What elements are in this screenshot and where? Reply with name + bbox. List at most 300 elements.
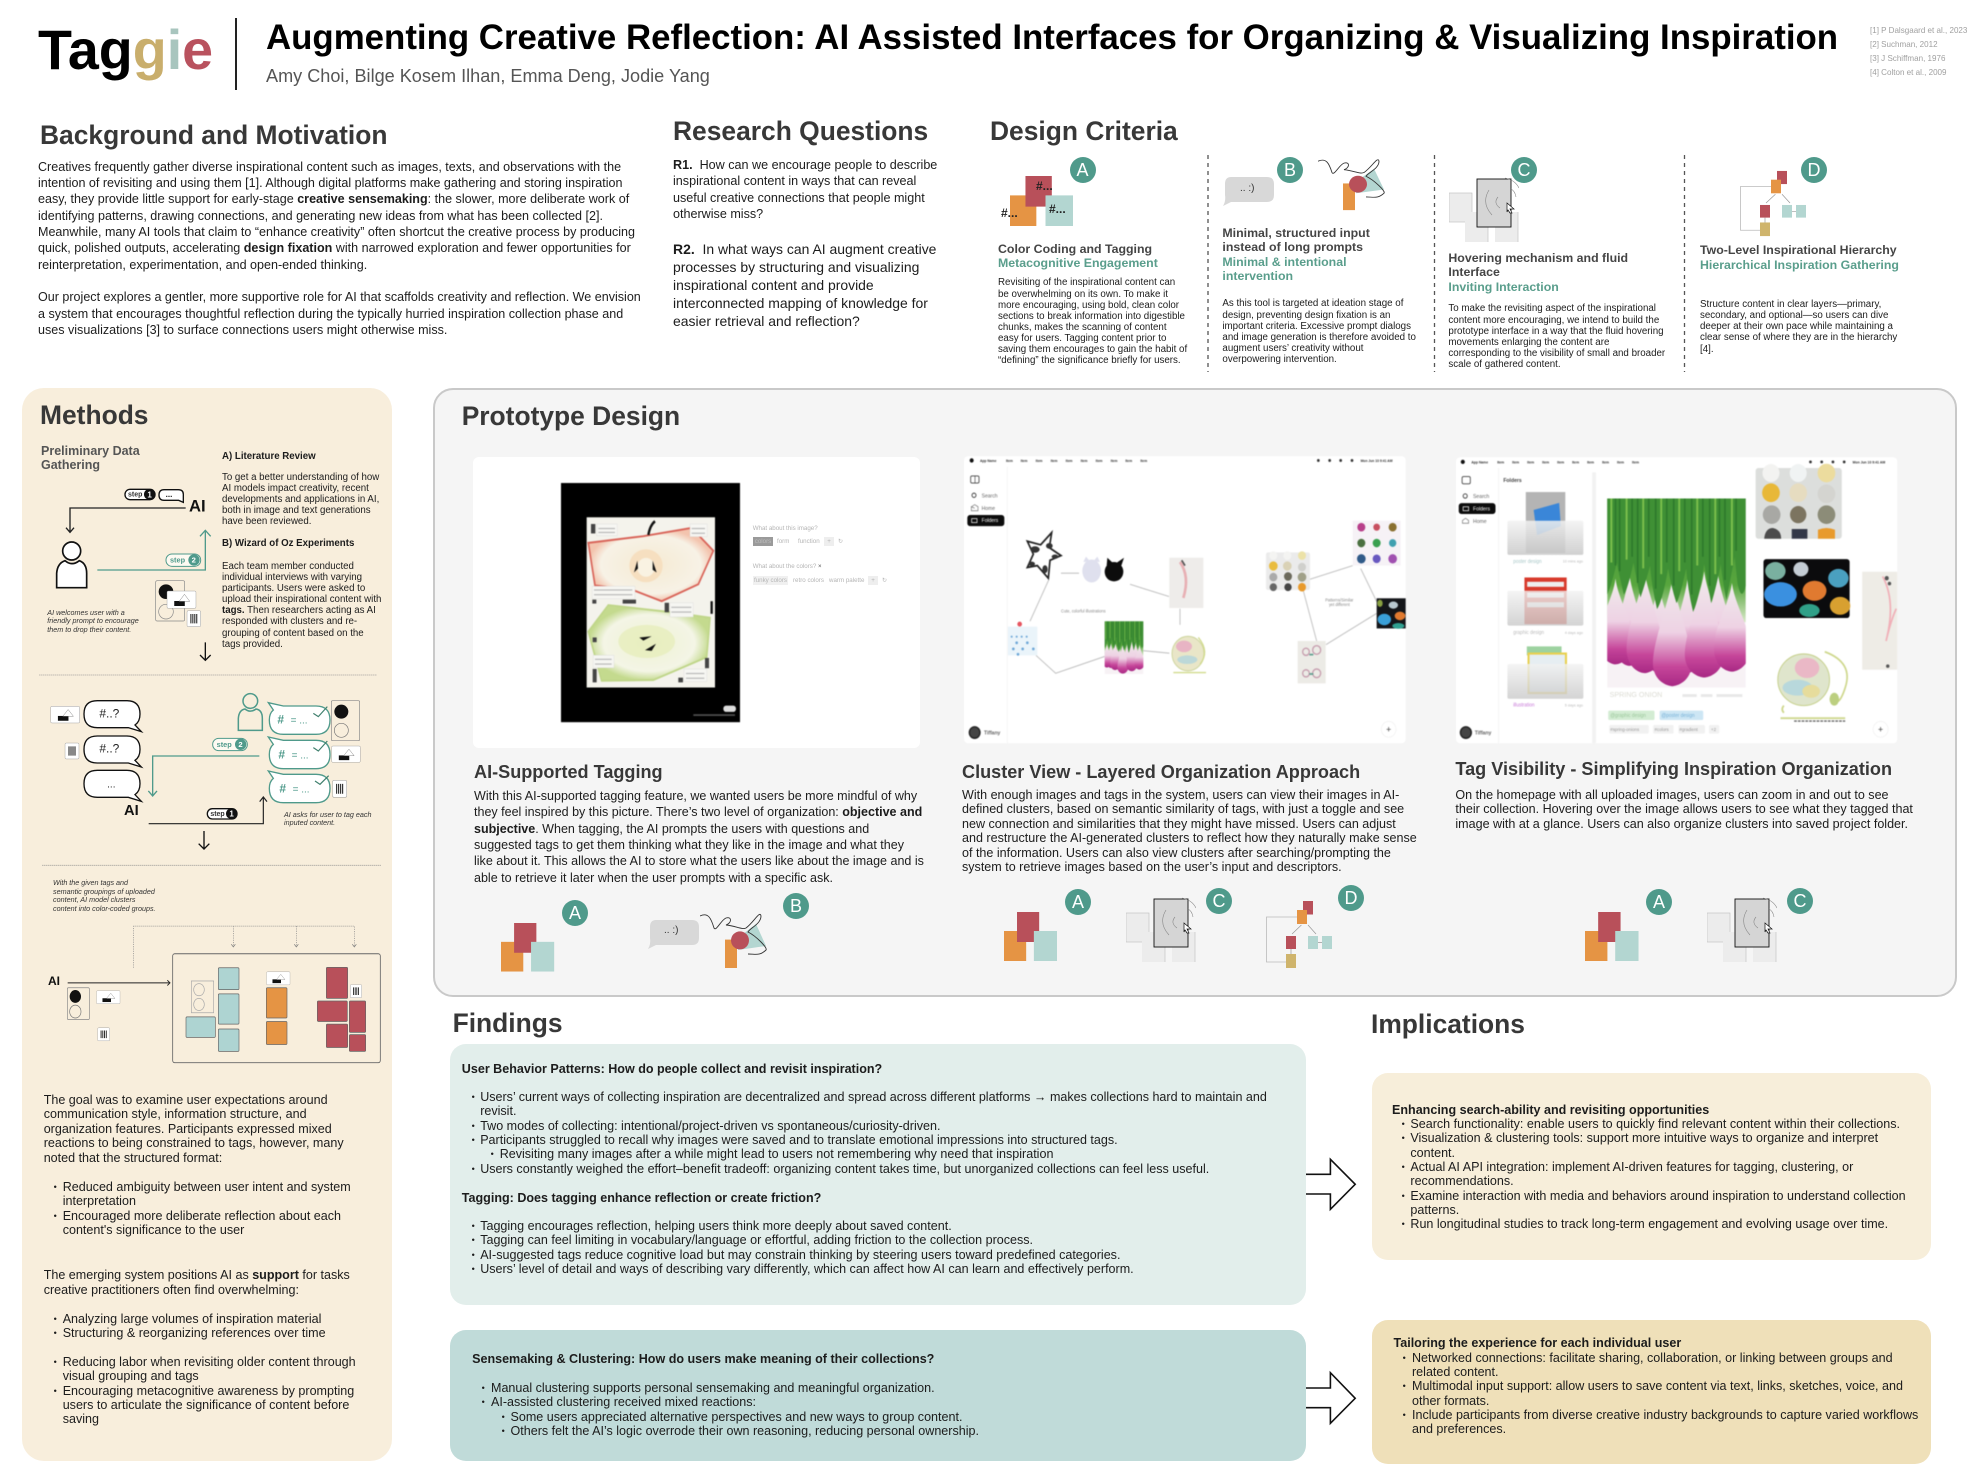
- list: searchability: Examine interaction with media and behaviors around inspiration to understand collection: [1410, 1189, 1906, 1203]
- icon: speech bubble: [1223, 177, 1274, 206]
- tagging prompts: +: [827, 538, 831, 545]
- badge A: [1646, 889, 1672, 915]
- text: goal: The goal was to examine user expectations around: [44, 1093, 328, 1107]
- bubble text: #..?: [99, 707, 120, 721]
- icon: hover cards: [1449, 178, 1519, 242]
- bubble text: [99, 707, 120, 791]
- list: tailoring: Multimodal input support: allow users to save content via text, links, sketches, voice, and: [1412, 1379, 1903, 1393]
- icon: criterion A: [501, 923, 554, 972]
- list: user behavior: [480, 1090, 1267, 1176]
- list: user behavior: •: [491, 1149, 494, 1159]
- heading: sensemaking: Sensemaking & Clustering: How do users make meaning of their collections?: [472, 1352, 934, 1366]
- text: literature review: [222, 472, 380, 527]
- card: tag visibility screenshot: graphic design: [1513, 630, 1544, 636]
- menu bar: Item: [1081, 459, 1088, 463]
- criterion C: [1448, 157, 1665, 370]
- card: tag visibility screenshot: Folders: [1503, 478, 1522, 484]
- menu bar: Item: [1111, 459, 1118, 463]
- description: their collection. Hovering over the image allows users to see what they tagged that: [1455, 802, 1913, 816]
- text: wizard of oz: Each team member conducted: [222, 561, 354, 572]
- pill: step 1: 1: [229, 810, 234, 819]
- R2 text: R2. In what ways can AI augment creative: [673, 241, 936, 257]
- badge C: [1206, 888, 1232, 914]
- bubble: AI greeting: ...: [166, 490, 172, 499]
- card: tag visibility screenshot: 4 days ago: [1565, 631, 1583, 635]
- heading C: Hovering mechanism and fluid: [1448, 251, 1628, 265]
- list: sensemaking: •: [502, 1426, 505, 1436]
- R1 text: R1. How can we encourage people to describe: [673, 158, 937, 172]
- arrow: findings to implications 1: [1306, 1158, 1356, 1210]
- description: able to retrieve it later when the user prompts with a specific ask.: [474, 871, 833, 885]
- menu bar: App Name: [1471, 460, 1488, 464]
- text: wizard of oz: participants. Users were asked to: [222, 583, 365, 594]
- panel: methods: •: [54, 1314, 57, 1324]
- panel: implications tailoring: [1372, 1320, 1931, 1464]
- bubbles: user tags: = ...: [293, 784, 310, 795]
- menu bar: Item: [1572, 460, 1579, 464]
- text D: deeper at their own pace while maintaining a: [1700, 321, 1893, 332]
- description: [474, 788, 924, 886]
- text: wizard of oz: tags provided.: [222, 639, 283, 650]
- tagging prompts: ↻: [838, 538, 843, 545]
- pill: step 2: 2: [238, 740, 243, 749]
- diagram: AI clustering: [67, 926, 381, 1064]
- icon: criterion C: [1126, 897, 1196, 963]
- list: tailoring: [1412, 1350, 1918, 1437]
- tagging prompts: +: [871, 577, 875, 584]
- menu bar: Mon Jun 10 9:41 AM: [1853, 460, 1885, 464]
- icon: user green: [238, 694, 262, 730]
- connector lines: [133, 926, 354, 968]
- bubbles: user tags: #: [278, 747, 285, 761]
- card: tag visibility screenshot: illustration: [1513, 703, 1535, 709]
- icon: criterion D: [1266, 898, 1334, 970]
- description: subjective. When tagging, the AI prompts the users with questions and: [474, 822, 869, 836]
- tagging prompts: funky colors: [754, 577, 787, 584]
- pill: step 2: [166, 554, 201, 566]
- menu bar: Item: [1512, 460, 1519, 464]
- R1 text: otherwise miss?: [673, 207, 763, 221]
- panel: findings behaviour and tagging: •: [471, 1221, 474, 1231]
- pill: step 2: step: [217, 740, 232, 749]
- text: wizard of oz: [222, 561, 381, 650]
- authors: Amy Choi, Bilge Kosem Ilhan, Emma Deng, Jodie Yang: [266, 66, 710, 86]
- panel: implications searchability: •: [1401, 1133, 1405, 1143]
- panel: methods: •: [54, 1211, 57, 1221]
- text: literature review: both in image and text generations: [222, 505, 371, 516]
- panel: findings behaviour and tagging: •: [471, 1250, 474, 1260]
- text A: Revisiting of the inspirational content can: [998, 277, 1175, 288]
- cluster images left: [1027, 533, 1061, 578]
- grid image: [1756, 468, 1842, 539]
- poster image: [560, 482, 741, 723]
- heading C: Inviting Interaction: [1448, 280, 1559, 294]
- list: structured format: interpretation: [63, 1194, 136, 1208]
- section: background and motivation: [38, 120, 641, 337]
- list: tagging: [480, 1219, 1134, 1276]
- heading: tagging: Tagging: Does tagging enhance reflection or create friction?: [462, 1190, 821, 1204]
- list: tailoring: Networked connections: facilitate sharing, collaboration, or linking between groups and: [1412, 1350, 1893, 1364]
- description: With enough images and tags in the system, users can view their images in AI-: [962, 788, 1399, 802]
- list: tailoring: other formats.: [1412, 1394, 1489, 1408]
- panel: findings behaviour and tagging: •: [471, 1264, 474, 1274]
- card: cluster view screenshot: Cute, colorful illustrations: [1061, 609, 1106, 614]
- arrow: down: [199, 831, 209, 849]
- description: new connection and similarities that they might have missed. Users can adjust: [962, 817, 1396, 831]
- menu bar: Item: [1021, 459, 1028, 463]
- badge B: [1277, 157, 1303, 183]
- caption: clustering: content, AI model clusters: [53, 895, 135, 904]
- caption: clustering: semantic groupings of uploaded: [53, 886, 155, 896]
- text: goal: [44, 1093, 344, 1164]
- text D: Structure content in clear layers—primary,: [1700, 299, 1881, 310]
- red cluster: [317, 967, 366, 1051]
- heading A: Color Coding and Tagging: [998, 242, 1152, 256]
- R1 text: [673, 158, 937, 221]
- heading B: [1222, 226, 1370, 283]
- panel: implications searchability: •: [1401, 1219, 1405, 1229]
- menu bar: Item: [1096, 459, 1103, 463]
- pill: step 2: step: [170, 556, 186, 565]
- background text: identifying patterns, drawing connections, and generating new ideas from what has been collected [2].: [38, 209, 603, 223]
- bubble text: .. :): [1240, 183, 1254, 194]
- text: goal: organization features. Participants expressed mixed: [44, 1122, 332, 1136]
- menu bar: Item: [1125, 459, 1132, 463]
- background text: easy, they provide little support for early-stage creative sensemaking: the slower, more deliberate work of: [38, 192, 629, 206]
- teal cluster: [186, 968, 239, 1051]
- text: wizard of oz: upload their inspirational content with: [222, 594, 381, 605]
- references: [1870, 26, 1967, 77]
- menu bar: Item: [1066, 459, 1073, 463]
- tagging prompts: colors: [755, 538, 771, 545]
- panel: implications searchability: [1372, 1073, 1931, 1260]
- column: cluster view text: [962, 761, 1432, 875]
- list: tailoring: and preferences.: [1412, 1422, 1506, 1436]
- caption: tag request: inputed content.: [284, 818, 335, 827]
- list: searchability: Search functionality: enable users to quickly find relevant content within their collections.: [1410, 1117, 1900, 1131]
- badge C: [1787, 888, 1813, 914]
- card: tag visibility screenshot: [1456, 457, 1898, 744]
- heading B: Minimal & intentional: [1222, 255, 1347, 269]
- card: tag visibility screenshot: 5 days ago: [1565, 703, 1583, 707]
- bubbles: user tags: #: [277, 713, 284, 727]
- menu bar: Item: [1617, 460, 1624, 464]
- panel: findings behaviour and tagging: •: [471, 1121, 474, 1131]
- list: user behavior: Users’ current ways of collecting inspiration are decentralized and spread across different platforms → makes collections hard to maintain and: [480, 1090, 1267, 1104]
- icon: colour tags: [1010, 176, 1073, 226]
- text B: design, preventing design fixation is an: [1222, 310, 1390, 321]
- caption: welcome prompt: AI welcomes user with a: [47, 608, 125, 617]
- panel: methods: [22, 388, 392, 1461]
- subheading: preliminary data gathering: Preliminary Data: [41, 444, 140, 458]
- heading: background: Background and Motivation: [40, 120, 388, 150]
- description: they feel inspired by this picture. There’s two level of organization: objective and: [474, 805, 922, 819]
- background text: quick, polished outputs, accelerating design fixation with narrowed exploration and fewer opportunities for: [38, 241, 631, 255]
- description: like about it. This allows the AI to store what the users like about the image and is: [474, 854, 924, 868]
- list: structured format: Encouraged more deliberate reflection about each: [63, 1209, 341, 1223]
- description: system to retrieve images based on the user’s input and descriptors.: [962, 860, 1342, 874]
- text A: easy for users. Tagging content prior to: [998, 333, 1166, 344]
- list: reducing labor: users to articulate the significance of content before: [63, 1398, 349, 1412]
- badge D: D: [1808, 160, 1820, 180]
- bubble text: #..?: [99, 742, 120, 756]
- list: sensemaking: Manual clustering supports personal sensemaking and meaningful organization.: [491, 1381, 935, 1395]
- bubble text: .. :): [664, 925, 678, 936]
- badge B: B: [790, 896, 802, 916]
- card: AI tagging screenshot: [473, 456, 920, 748]
- badge B: [783, 892, 809, 918]
- list: searchability: content.: [1410, 1146, 1455, 1160]
- list: structured format: [54, 1180, 351, 1237]
- unsorted items: [67, 988, 120, 1041]
- text: wizard of oz: tags. Then researchers acting as AI: [222, 605, 376, 616]
- background text: [38, 160, 641, 337]
- description: image with at a glance. Users can also organize clusters into saved project folder.: [1455, 817, 1908, 831]
- panel: implications tailoring: •: [1403, 1353, 1406, 1363]
- tagging prompts: retro colors: [793, 577, 824, 584]
- heading B: instead of long prompts: [1222, 240, 1363, 254]
- badge A: [1065, 889, 1091, 915]
- list: support tasks: Analyzing large volumes of inspiration material: [63, 1312, 321, 1326]
- text C: movements enlarging the content are: [1448, 337, 1609, 348]
- list: sensemaking: AI-assisted clustering received mixed reactions:: [491, 1395, 756, 1409]
- card: tag visibility screenshot: SPRING ONION: [1610, 690, 1662, 699]
- caption: welcome prompt: them to drop their content.: [47, 625, 131, 634]
- references: [4] Colton et al., 2009: [1870, 68, 1946, 77]
- list: user behavior: Revisiting many images after a while might lead to users not remembering why need that inspiration: [500, 1147, 1053, 1161]
- panel: findings behaviour and tagging: [450, 1044, 1306, 1305]
- card: cluster view screenshot: yet different: [1329, 602, 1351, 607]
- icon: criterion A: [1584, 912, 1638, 961]
- text: wizard of oz: grouping of content based on the: [222, 628, 364, 639]
- badge A: A: [1076, 160, 1088, 180]
- background text: a system that encourages thoughtful reflection during the typically hurried inspiration collection phase and: [38, 307, 623, 321]
- panel: implications searchability: •: [1401, 1191, 1405, 1201]
- caption: clustering: content into color-coded groups.: [53, 904, 156, 912]
- text D: clear sense of where they are in the hierarchy: [1700, 332, 1897, 343]
- menu bar: Item: [1036, 459, 1043, 463]
- list: reducing labor: Encouraging metacognitive awareness by prompting: [63, 1384, 354, 1398]
- background text: Our project explores a gentler, more supportive role for AI that scaffolds creativity and reflection. We envision: [38, 290, 641, 304]
- menu bar: Item: [1051, 459, 1058, 463]
- icon: criterion C: [1707, 897, 1777, 963]
- list: sensemaking: Others felt the AI’s logic overrode their own reasoning, reducing personal ownership.: [510, 1424, 979, 1438]
- column: tag visibility text: [1455, 758, 1935, 832]
- badge A: [562, 900, 588, 926]
- list: support tasks: Structuring & reorganizing references over time: [63, 1326, 326, 1340]
- text B: augment users’ creativity without: [1222, 343, 1363, 354]
- menu bar: Item: [1602, 460, 1609, 464]
- pill: step 1: [207, 808, 237, 819]
- text: goal: communication style, information structure, and: [44, 1107, 307, 1121]
- heading: tailoring: Tailoring the experience for each individual user: [1394, 1336, 1681, 1350]
- panel: implications searchability: •: [1401, 1119, 1405, 1129]
- text D: secondary, and optional—so users can dive: [1700, 310, 1888, 321]
- list: user behavior: Users constantly weighed the effort–benefit tradeoff: organizing content takes time, but unorganized collections can feel less useful.: [480, 1162, 1209, 1176]
- list: user behavior: Two modes of collecting: intentional/project-driven vs spontaneous/curiosity-driven.: [480, 1119, 940, 1133]
- heading: findings: Findings: [453, 1008, 563, 1038]
- list: searchability: [1410, 1117, 1906, 1232]
- heading: wizard of oz: B) Wizard of Oz Experiments: [222, 538, 354, 549]
- tagging prompts: [752, 524, 892, 586]
- diagram: tagging flow: [42, 692, 381, 1017]
- icon: mouse scribble: [1318, 159, 1385, 210]
- card: tag visibility screenshot: poster design: [1513, 559, 1542, 565]
- description: On the homepage with all uploaded images, users can zoom in and out to see: [1455, 788, 1889, 802]
- text: emerging system: The emerging system positions AI as support for tasks: [44, 1268, 350, 1282]
- badge C: C: [1518, 160, 1530, 180]
- list: sensemaking: [491, 1381, 979, 1438]
- badge D: [1338, 885, 1364, 911]
- criterion A: [998, 157, 1188, 366]
- text C: corresponding to the visibility of small and broader: [1448, 348, 1665, 359]
- heading D: Hierarchical Inspiration Gathering: [1700, 258, 1899, 272]
- menu bar: [1461, 460, 1885, 464]
- label: AI: AI: [189, 497, 206, 516]
- card: cluster view screenshot: Search: [982, 493, 998, 500]
- background text: reinterpretation, experimentation, and open-ended thinking.: [38, 258, 367, 272]
- heading D: Two-Level Inspirational Hierarchy: [1700, 243, 1897, 257]
- arrow: down: [200, 642, 211, 660]
- card: tag visibility screenshot: Home: [1473, 519, 1487, 525]
- R2 text: interconnected mapping of knowledge for: [673, 295, 928, 311]
- description: of the information. Users can also view clusters after searching/prompting the: [962, 846, 1391, 860]
- badge A: A: [569, 902, 581, 922]
- description: defined clusters, based on semantic similarity of tags, with just a toggle and see: [962, 802, 1404, 816]
- icon: hierarchy: [1740, 170, 1806, 236]
- pill: step 1: step: [128, 492, 142, 499]
- list: structured format: Reduced ambiguity between user intent and system: [63, 1180, 351, 1194]
- heading B: Minimal, structured input: [1222, 226, 1370, 240]
- list: reducing labor: [54, 1355, 356, 1426]
- tagging prompts: ↻: [882, 577, 887, 584]
- caption: clustering: [53, 878, 156, 912]
- criterion B: [1222, 157, 1416, 365]
- menu bar: Item: [1587, 460, 1594, 464]
- panel: findings behaviour and tagging: •: [471, 1135, 474, 1145]
- text B: and image generation is therefore avoided to: [1222, 332, 1416, 343]
- right pale image: [1862, 572, 1897, 670]
- bubbles: user tags: = ...: [292, 750, 309, 761]
- list: searchability: recommendations.: [1410, 1174, 1514, 1188]
- text B: overpowering intervention.: [1222, 354, 1337, 365]
- caption: clustering: With the given tags and: [53, 878, 128, 887]
- text D: [4].: [1700, 344, 1714, 355]
- text C: prototype interface in a way that the fluid hovering: [1448, 326, 1664, 337]
- card: tag visibility screenshot: Folders: [1473, 506, 1490, 512]
- card: cluster view screenshot: Folders: [982, 518, 999, 524]
- menu bar: Mon Jun 10 9:41 AM: [1361, 459, 1393, 463]
- caption: tag request: [284, 810, 372, 827]
- card: tag visibility screenshot: Search: [1473, 494, 1489, 500]
- list: tailoring: related content.: [1412, 1365, 1498, 1379]
- heading C: Interface: [1448, 265, 1500, 279]
- heading: research questions: Research Questions: [673, 116, 928, 146]
- heading A: Metacognitive Engagement: [998, 256, 1158, 270]
- list: searchability: Run longitudinal studies to track long-term engagement and evolving usage over time.: [1410, 1217, 1888, 1231]
- text A: [998, 277, 1188, 366]
- R2 text: processes by structuring and visualizing: [673, 259, 919, 275]
- menu bar: Item: [1527, 460, 1534, 464]
- text: literature review: To get a better understanding of how: [222, 472, 379, 483]
- badge D: [1801, 157, 1827, 183]
- heading: user behavior: User Behavior Patterns: How do people collect and revisit inspiration?: [462, 1062, 882, 1076]
- references: [1] P Dalsgaard et al., 2023: [1870, 26, 1967, 35]
- panel: findings behaviour and tagging: •: [471, 1164, 474, 1174]
- subheading: preliminary data gathering: [41, 444, 140, 472]
- background text: Meanwhile, many AI tools that claim to “enhance creativity” often shortcut the creative process by producing: [38, 225, 635, 239]
- bubble: AI greeting: [159, 490, 183, 502]
- panel: findings behaviour and tagging: •: [471, 1092, 474, 1102]
- pill: step 1: [125, 489, 155, 500]
- heading: design criteria: Design Criteria: [990, 116, 1178, 146]
- list: tagging: Users’ level of detail and ways of describing vary differently, which can affect how AI can learn and effectively perform.: [480, 1262, 1134, 1276]
- header divider: [235, 18, 237, 90]
- badge C: C: [1212, 890, 1226, 910]
- text A: chunks, makes the scanning of content: [998, 322, 1167, 333]
- list: user behavior: Participants struggled to recall why images were saved and to translate emotional impressions into structured tags.: [480, 1133, 1118, 1147]
- menu bar: App Name: [980, 459, 997, 463]
- hash label red: #...: [1036, 179, 1053, 193]
- text B: [1222, 298, 1416, 365]
- list: tagging: Tagging encourages reflection, helping users think more deeply about saved content.: [480, 1219, 952, 1233]
- heading A: [998, 242, 1158, 270]
- menu bar: Item: [1632, 460, 1639, 464]
- card: tag visibility screenshot: Tiffany: [1475, 730, 1491, 736]
- R2 text: inspirational content and provide: [673, 277, 874, 293]
- text A: more encouraging, using bold, clean color: [998, 300, 1179, 311]
- heading: literature review: A) Literature Review: [222, 450, 316, 462]
- card: tag visibility screenshot: @poster design: [1661, 713, 1695, 719]
- text A: saving them encourages to gain the habit of: [998, 344, 1187, 355]
- text: literature review: have been reviewed.: [222, 516, 311, 527]
- hash label teal: #...: [1049, 202, 1066, 216]
- heading: searchability: Enhancing search-ability and revisiting opportunities: [1392, 1102, 1709, 1116]
- badge A: [1070, 157, 1096, 183]
- text C: [1448, 303, 1665, 370]
- panel: implications tailoring: •: [1403, 1381, 1406, 1391]
- tags: [1608, 711, 1655, 720]
- R2 text: [673, 241, 936, 329]
- panel: methods: •: [54, 1328, 57, 1338]
- criterion D: [1700, 157, 1899, 355]
- label: AI: AI: [124, 803, 139, 819]
- bubble text: ...: [107, 780, 115, 791]
- references: [2] Suchman, 2012: [1870, 40, 1938, 49]
- card: cluster view screenshot: Patterns/Similar: [1325, 597, 1354, 603]
- list: sensemaking: •: [502, 1412, 505, 1422]
- subheading: AI-Supported Tagging: [474, 762, 663, 782]
- text: goal: reactions to being constrained to tags, however, many: [44, 1136, 344, 1150]
- R1 text: inspirational content in ways that can reveal: [673, 174, 916, 188]
- description: and restructure the AI-generated clusters to reflect how they naturally make sense: [962, 831, 1417, 845]
- text C: scale of gathered content.: [1448, 359, 1561, 370]
- card: cluster view screenshot: Tiffany: [984, 730, 1000, 736]
- card: cluster view screenshot: [964, 456, 1406, 744]
- icon: uploaded content: [156, 581, 201, 627]
- text: wizard of oz: responded with clusters and re-: [222, 616, 357, 627]
- card: tag visibility screenshot: +: [1878, 724, 1883, 735]
- tagging prompts: form: [777, 538, 789, 545]
- caption: tag request: AI asks for user to tag each: [284, 810, 372, 819]
- card: cluster view screenshot: +: [1386, 724, 1391, 735]
- panel: findings behaviour and tagging: •: [471, 1235, 474, 1245]
- panel: implications tailoring: •: [1403, 1410, 1406, 1420]
- title: Augmenting Creative Reflection: AI Assisted Interfaces for Organizing & Visualizing Inspiration: [266, 18, 1838, 57]
- text: emerging system: creative practitioners often find overwhelming:: [44, 1283, 299, 1297]
- list: tailoring: Include participants from diverse creative industry backgrounds to capture varied workflows: [1412, 1408, 1918, 1422]
- subheading: Cluster View - Layered Organization Approach: [962, 762, 1360, 782]
